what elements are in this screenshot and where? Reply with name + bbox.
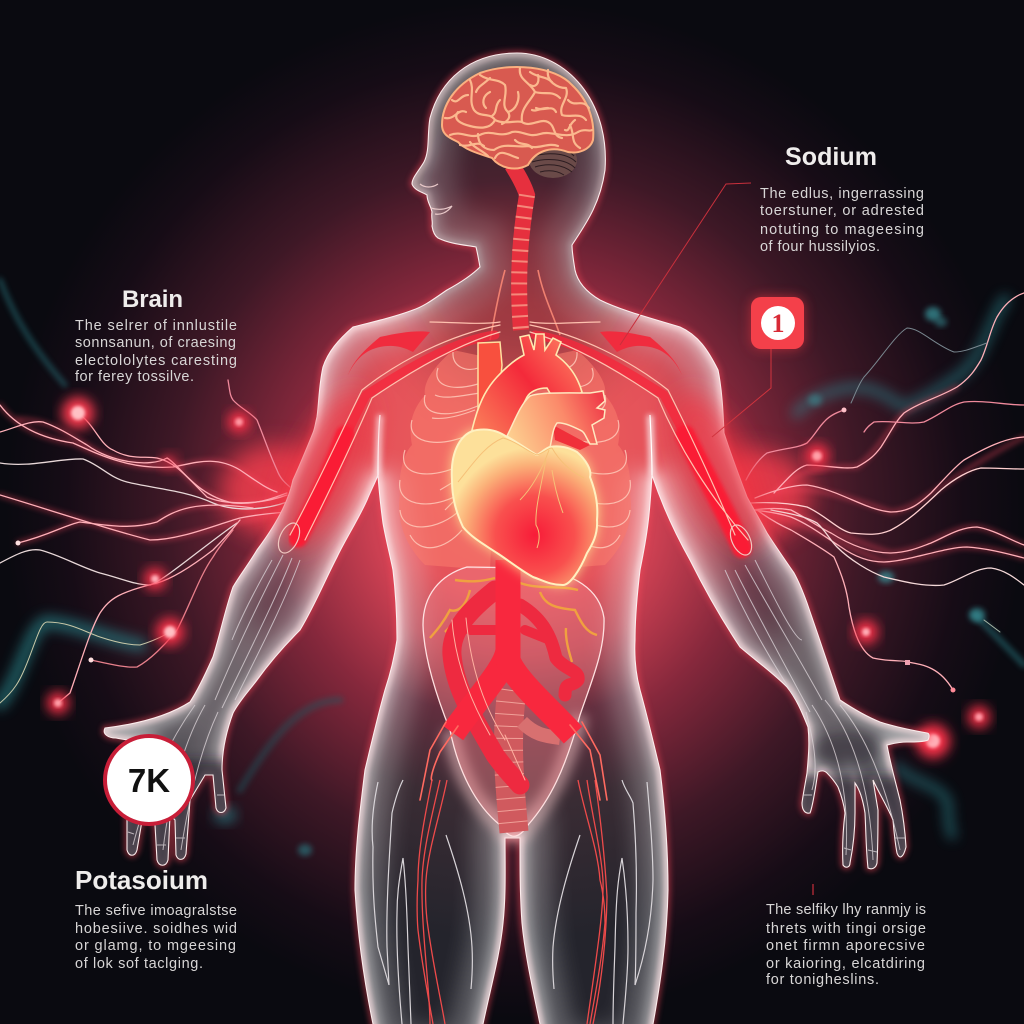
text: sodium description: of four hussilyios. <box>760 239 880 255</box>
text: potassium description <box>75 903 237 972</box>
text: potassium description: The sefive imoagralstse <box>75 903 237 919</box>
badge: number 1: 1 <box>772 309 784 338</box>
nerve wires right <box>746 293 1024 690</box>
text: bottom right description <box>766 902 926 988</box>
heading: Potassium: Potasoium <box>75 865 208 895</box>
callout line: badge <box>712 349 771 437</box>
cerebellum <box>529 142 577 178</box>
badge: number 1 <box>751 297 804 349</box>
pulmonary artery <box>553 425 590 450</box>
human body silhouette <box>104 53 929 1024</box>
face details <box>420 184 452 214</box>
body rim light <box>95 50 929 1024</box>
text: potassium description: or glamg, to mgeesing <box>75 938 236 954</box>
text: bottom right description: The selfiky lhy ranmjy is <box>766 902 926 918</box>
intestine <box>508 690 560 832</box>
glowing red nodes <box>16 397 990 758</box>
outer red glow around head and shoulders <box>104 53 929 1024</box>
text: brain description <box>75 318 237 385</box>
text: brain description: The selrer of innlustile <box>75 318 237 334</box>
vena cava trunk <box>478 342 502 440</box>
lungs and rib cage <box>399 350 631 570</box>
ventricles <box>452 429 597 585</box>
aortic arch <box>472 334 582 437</box>
stat circle: 7K: 7K <box>128 762 170 799</box>
text: potassium description: of lok sof taclging. <box>75 956 203 972</box>
body outline <box>104 53 929 1024</box>
spine and neck vessels <box>490 165 560 340</box>
brain <box>442 67 593 178</box>
stat circle: 7K <box>105 736 193 824</box>
pelvis shield <box>423 567 604 836</box>
forearm and hand tendons <box>128 555 905 860</box>
text: potassium description: hobesiive. soidhes wid <box>75 921 237 937</box>
callout line: sodium <box>620 183 751 345</box>
text: sodium description <box>760 186 924 255</box>
text: sodium description: toerstuner, or adrested <box>760 203 924 219</box>
text: brain description: for ferey tossilve. <box>75 369 194 385</box>
coronary vessels <box>458 438 584 548</box>
text: bottom right description: threts with tingi orsige <box>766 921 926 937</box>
text: brain description: sonnsanun, of craesing <box>75 335 236 351</box>
text: brain description: electololytes caresting <box>75 353 237 369</box>
text: bottom right description: or kaioring, elcatdiring <box>766 956 925 972</box>
callout tick <box>812 884 814 895</box>
heading: Brain: Brain <box>122 286 183 313</box>
abdominal arteries <box>420 560 607 800</box>
leg contour lines <box>372 780 653 1024</box>
text: sodium description: The edlus, ingerrassing <box>760 186 924 202</box>
heading: Sodium: Sodium <box>785 143 877 171</box>
text: sodium description: notuting to mageesing <box>760 222 924 238</box>
heart <box>452 334 605 585</box>
text: bottom right description: onet firmn aporecsive <box>766 938 925 954</box>
teal glow trails <box>0 280 1024 856</box>
orange branching vessels <box>430 578 597 662</box>
armpit creases <box>378 415 652 475</box>
leg arteries <box>417 780 607 1024</box>
text: bottom right description: for tonigheslins. <box>766 972 879 988</box>
arm vessels <box>260 322 785 561</box>
nerve wires left <box>0 380 1024 703</box>
